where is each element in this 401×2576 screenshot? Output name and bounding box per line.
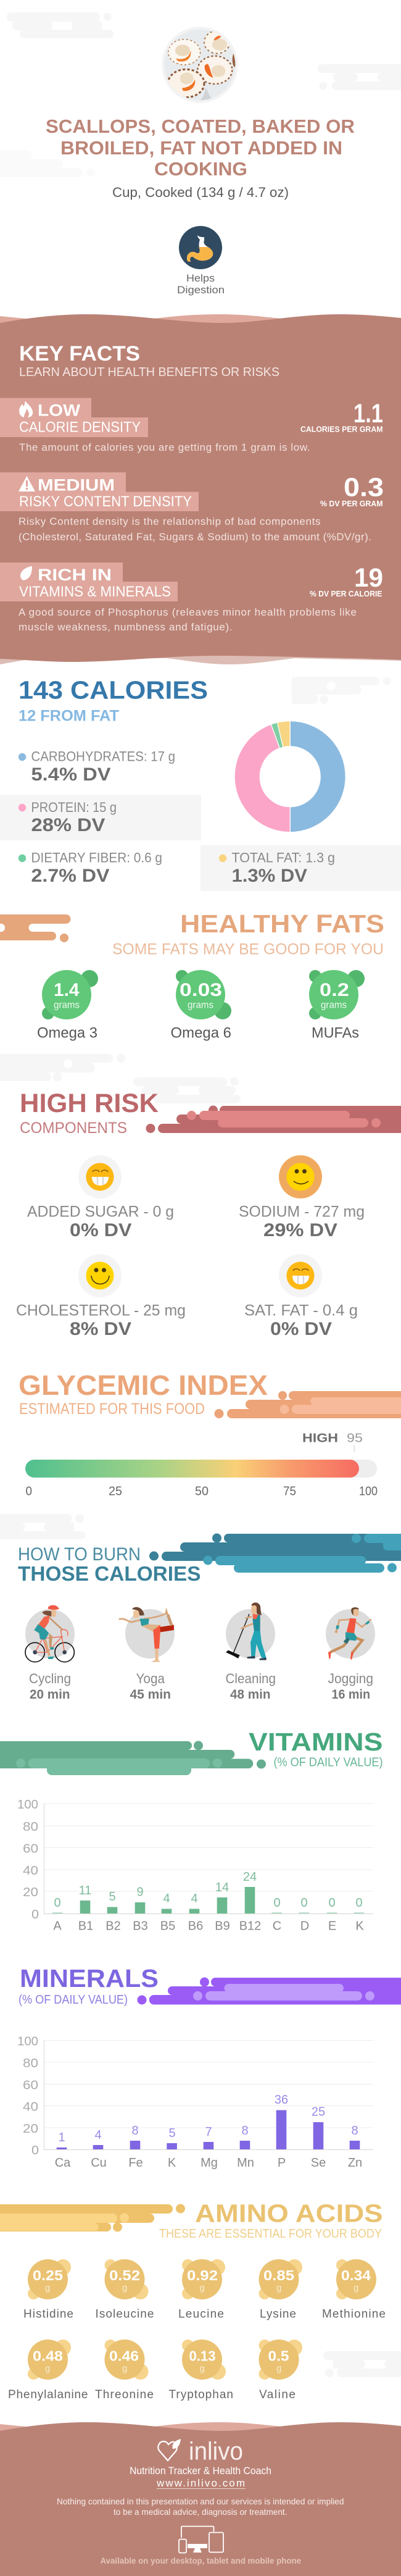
bar chart: vitamins: 9 [136, 1886, 144, 1899]
amino acid: tryptophan: Tryptophan [169, 2388, 233, 2401]
fat: omega 6 [170, 970, 231, 1041]
bar chart: minerals [17, 2035, 373, 2170]
risk: cholesterol [16, 1254, 186, 1339]
nutrient: protein: 28% DV [31, 815, 105, 835]
benefit label: Helps [186, 272, 215, 284]
bar chart: vitamins: B9 [215, 1919, 230, 1933]
amino acid: leucine: 0.92 [187, 2267, 218, 2283]
amino acid: methionine [322, 2259, 386, 2320]
amino acid: lysine: g [276, 2283, 281, 2293]
background cloud: amino acids [323, 2351, 401, 2377]
bar chart: minerals: 8 [241, 2124, 249, 2138]
bar chart: vitamins: K [355, 1919, 364, 1933]
chart: glycemic scale [25, 1431, 378, 1498]
fact: medium risky content density: MEDIUM [38, 475, 115, 494]
fat: omega 6: Omega 6 [170, 1025, 231, 1041]
fat: omega 3: grams [54, 1000, 80, 1010]
title [46, 115, 355, 180]
amino acid: isoleucine [95, 2259, 154, 2320]
amino acid: histidine [23, 2259, 73, 2320]
fact: rich in vitamins and minerals: % DV PER CALORIE [310, 589, 382, 598]
title: COOKING [154, 158, 247, 180]
fat: omega 3 [37, 970, 98, 1041]
benefit label [177, 272, 225, 296]
bar chart: vitamins: 0 [300, 1896, 308, 1910]
activity: jogging [326, 1607, 375, 1702]
bar chart: vitamins [17, 1798, 373, 1933]
bar chart: vitamins: 80 [23, 1820, 38, 1834]
amino acid: valine: 0.5 [268, 2348, 289, 2364]
stat bands [0, 795, 401, 891]
nutrient: dietary fiber: 2.7% DV [31, 866, 110, 886]
amino acid: histidine: 0.25 [33, 2267, 63, 2283]
bar chart: vitamins: 0 [328, 1896, 336, 1910]
bar chart: vitamins: E [328, 1919, 336, 1933]
bar chart: minerals: Mn [237, 2156, 254, 2170]
amino acid: lysine [259, 2259, 302, 2320]
amino acid: threonine [95, 2340, 154, 2401]
bar chart: vitamins: B5 [160, 1919, 175, 1933]
amino acid: valine: Valine [259, 2388, 296, 2401]
fact: low calorie density: 1.1 [353, 399, 383, 429]
heading: how to burn those calories [18, 1544, 201, 1585]
activity: cleaning: 48 min [230, 1687, 270, 1702]
subheading: amino acids: THESE ARE ESSENTIAL FOR YOUR BODY [159, 2227, 382, 2241]
amino acid: tryptophan [169, 2340, 233, 2401]
amino acid: isoleucine: Isoleucine [95, 2308, 154, 2320]
banner graphic: vitamins [0, 1741, 266, 1775]
bar chart: vitamins: 0 [273, 1896, 281, 1910]
amino acid: leucine: Leucine [178, 2308, 224, 2320]
subheading: from fat: 12 FROM FAT [19, 708, 119, 725]
bar chart: vitamins: 4 [191, 1892, 198, 1905]
amino acid: valine: g [276, 2364, 281, 2373]
activity: jogging: 16 min [332, 1687, 370, 1702]
heading: amino acids: AMINO ACIDS [195, 2199, 382, 2228]
chart: glycemic scale: 25 [109, 1484, 122, 1498]
fat: omega 6: grams [188, 1000, 213, 1010]
nutrient: protein [19, 800, 117, 835]
fact: low calorie density: The amount of calories you are getting from 1 gram is low. [19, 441, 310, 453]
amino acid: lysine: Lysine [260, 2308, 296, 2320]
bar chart: vitamins: 100 [17, 1798, 38, 1812]
fact: rich in vitamins and minerals: VITAMINS & MINERALS [19, 583, 171, 600]
bar chart: minerals: 20 [23, 2122, 38, 2136]
bar chart: minerals: Mg [200, 2156, 218, 2170]
bar chart: vitamins: 11 [79, 1884, 91, 1897]
amino acid: tryptophan: 0.13 [189, 2348, 216, 2364]
bar chart: vitamins: B2 [105, 1919, 121, 1933]
fact: rich in vitamins and minerals: A good source of Phosphorus (releaves minor health problems like [19, 606, 357, 618]
fact: low calorie density: CALORIES PER GRAM [300, 425, 382, 433]
fact: low calorie density [0, 398, 383, 453]
banner graphic: minerals [137, 1977, 401, 2004]
background clouds: header [0, 12, 401, 177]
nutrient: total fat: 1.3% DV [232, 866, 307, 886]
bar chart: vitamins: B3 [133, 1919, 148, 1933]
nutrient: carbohydrates: 5.4% DV [31, 764, 111, 785]
bar chart: vitamins: B6 [188, 1919, 203, 1933]
disclaimer: to be a medical advice, diagnosis or treatment. [114, 2507, 287, 2517]
nutrient: carbohydrates [19, 748, 175, 785]
subheading: vitamins: (% OF DAILY VALUE) [274, 1756, 382, 1770]
banner graphic: amino acids [0, 2204, 185, 2231]
activity: yoga: 45 min [130, 1687, 171, 1702]
background clouds: high risk [0, 1054, 241, 1103]
bar chart: minerals: 4 [94, 2128, 102, 2142]
activity: jogging: Jogging [328, 1671, 373, 1686]
website link: www.inlivo.com [156, 2477, 245, 2489]
bar chart: minerals: 7 [205, 2125, 212, 2139]
bar chart: minerals: 100 [17, 2035, 38, 2049]
fat: omega 3: Omega 3 [37, 1025, 97, 1041]
amino acid: valine [259, 2340, 302, 2401]
food photo: scallops [162, 27, 238, 103]
fat: omega 6: 0.03 [180, 980, 222, 1000]
bar chart: vitamins: A [53, 1919, 62, 1933]
activity: cycling [25, 1605, 75, 1702]
risk: saturated fat [244, 1254, 358, 1339]
fat: MUFAs [309, 970, 365, 1041]
amino acid: methionine: g [353, 2283, 358, 2293]
subheading: glycemic index: ESTIMATED FOR THIS FOOD [19, 1400, 205, 1418]
icon: devices [179, 2527, 223, 2553]
fact: rich in vitamins and minerals: muscle weakness, numbness and fatigue). [19, 621, 232, 633]
risk: added sugar [27, 1155, 174, 1240]
heading: calories: 143 CALORIES [19, 675, 208, 704]
chart: macronutrient donut [234, 721, 345, 832]
bar chart: vitamins: 60 [23, 1842, 38, 1856]
bar chart: vitamins: B1 [78, 1919, 93, 1933]
chart: glycemic scale: 75 [283, 1484, 296, 1498]
bar chart: minerals: K [168, 2156, 176, 2170]
activity: cleaning [226, 1602, 276, 1702]
nutrient: dietary fiber: DIETARY FIBER: 0.6 g [31, 850, 162, 866]
fact: low calorie density: LOW [38, 401, 81, 420]
bar chart: vitamins: C [273, 1919, 281, 1933]
bar chart: minerals: 8 [351, 2124, 358, 2138]
nutrient: total fat [219, 850, 335, 886]
subheading: LEARN ABOUT HEALTH BENEFITS OR RISKS [19, 366, 279, 379]
fat: MUFAs: grams [321, 1000, 347, 1010]
fact: medium risky content density: (Cholesterol, Saturated Fat, Sugars & Sodium) to the amount (%DV/gr). [19, 531, 371, 543]
fact: medium risky content density: % DV PER GRAM [320, 499, 382, 508]
heading: key facts: KEY FACTS [19, 342, 140, 366]
bar chart: minerals: Se [311, 2156, 326, 2170]
icon: stomach, helps digestion [179, 226, 222, 269]
risk: added sugar: ADDED SUGAR - 0 g [27, 1203, 174, 1220]
nutrient: protein: PROTEIN: 15 g [31, 800, 117, 815]
disclaimer: Nothing contained in this presentation and our services is intended or implied [57, 2496, 344, 2506]
bar chart: vitamins: 40 [23, 1864, 38, 1878]
bar chart: minerals: Fe [128, 2156, 143, 2170]
background cloud: burn calories [0, 1514, 85, 1539]
subheading: healthy fats: SOME FATS MAY BE GOOD FOR YOU [112, 941, 384, 958]
bar chart: minerals: 5 [168, 2126, 176, 2140]
fat: MUFAs: MUFAs [312, 1025, 359, 1041]
fact: low calorie density: CALORIE DENSITY [19, 419, 141, 436]
bar chart: minerals: 60 [23, 2078, 38, 2092]
bar chart: vitamins: D [300, 1919, 309, 1933]
activity: yoga: Yoga [136, 1671, 165, 1686]
heading: healthy fats: HEALTHY FATS [180, 910, 384, 938]
risk: cholesterol: 8% DV [70, 1319, 131, 1339]
chart: glycemic scale: 0 [26, 1484, 32, 1498]
risk: saturated fat: SAT. FAT - 0.4 g [244, 1302, 358, 1319]
fact: medium risky content density: Risky Content density is the relationship of bad components [19, 516, 321, 527]
footer panel [0, 2422, 401, 2576]
availability note: Available on your desktop, tablet and mobile phone [100, 2556, 301, 2566]
bar chart: vitamins: 0 [31, 1908, 39, 1922]
title: SCALLOPS, COATED, BAKED OR [46, 115, 355, 137]
nutrient: carbohydrates: CARBOHYDRATES: 17 g [31, 748, 175, 764]
amino acid: histidine: g [45, 2283, 50, 2293]
amino acid: phenylalanine: Phenylalanine [8, 2388, 88, 2401]
fact: medium risky content density: 0.3 [344, 473, 384, 503]
nutrient: total fat: TOTAL FAT: 1.3 g [232, 850, 335, 866]
amino acid: isoleucine: 0.52 [109, 2267, 140, 2283]
risk: saturated fat: 0% DV [270, 1319, 332, 1339]
risk: added sugar: 0% DV [70, 1220, 132, 1240]
fact: medium risky content density [0, 472, 384, 543]
amino acid: leucine: g [200, 2283, 205, 2293]
heading: vitamins: VITAMINS [249, 1728, 382, 1756]
bar chart: minerals: 1 [58, 2131, 65, 2144]
bar chart: vitamins: 20 [23, 1886, 38, 1899]
bar chart: vitamins: B12 [239, 1919, 261, 1933]
amino acid: isoleucine: g [122, 2283, 127, 2293]
amino acid: histidine: Histidine [23, 2308, 73, 2320]
fact: rich in vitamins and minerals: RICH IN [38, 566, 112, 584]
amino acid: methionine: Methionine [322, 2308, 386, 2320]
bar chart: vitamins: 5 [109, 1890, 116, 1904]
amino acid: threonine: Threonine [95, 2388, 154, 2401]
logo: wordmark: inlivo [189, 2436, 243, 2465]
activity: yoga [119, 1607, 175, 1702]
bar chart: vitamins: 0 [355, 1896, 363, 1910]
fat: omega 3: 1.4 [54, 980, 80, 1000]
disclaimer [57, 2496, 344, 2517]
risk: sodium [239, 1155, 365, 1240]
bar chart: minerals: 40 [23, 2101, 38, 2114]
heading: minerals: MINERALS [20, 1964, 159, 1993]
activity: cycling: 20 min [30, 1687, 70, 1702]
logo: heart and leaf [158, 2439, 181, 2461]
bar chart: vitamins: 0 [54, 1896, 61, 1910]
subheading: components: COMPONENTS [20, 1119, 127, 1137]
amino acid: phenylalanine: g [45, 2364, 50, 2373]
banner graphic: healthy fats [0, 914, 71, 942]
bar chart: minerals: 80 [23, 2057, 38, 2070]
serving size: Cup, Cooked (134 g / 4.7 oz) [112, 185, 289, 200]
bar chart: vitamins: 14 [215, 1881, 229, 1894]
amino acid: lysine: 0.85 [263, 2267, 294, 2283]
amino acid: methionine: 0.34 [341, 2267, 371, 2283]
benefit label: Digestion [177, 284, 225, 296]
tagline: Nutrition Tracker & Health Coach [130, 2465, 271, 2477]
heading: high risk: HIGH RISK [20, 1089, 159, 1118]
bar chart: minerals: 8 [131, 2124, 139, 2138]
chart: glycemic scale: HIGH [302, 1431, 338, 1445]
panel: key facts [0, 314, 401, 664]
fat: MUFAs: 0.2 [320, 980, 349, 1000]
chart: glycemic scale: 100 [359, 1484, 378, 1498]
fact: rich in vitamins and minerals: 19 [354, 563, 383, 593]
amino acid: phenylalanine [8, 2340, 88, 2401]
fact: rich in vitamins and minerals [0, 562, 383, 633]
heading: how to burn those calories: HOW TO BURN [18, 1544, 141, 1565]
banner graphic: high risk [146, 1105, 401, 1133]
heading: glycemic index: GLYCEMIC INDEX [19, 1370, 268, 1401]
amino acid: threonine: 0.46 [109, 2348, 139, 2364]
bar chart: minerals: 0 [31, 2144, 39, 2157]
heading: how to burn those calories: THOSE CALORIES [18, 1562, 201, 1585]
bar chart: vitamins: 24 [243, 1870, 257, 1884]
chart: glycemic scale: 50 [195, 1484, 209, 1498]
banner graphic: burn calories [149, 1534, 401, 1573]
amino acid: leucine [178, 2259, 225, 2320]
activity: cycling: Cycling [29, 1671, 71, 1686]
bar chart: minerals: P [278, 2156, 286, 2170]
bar chart: minerals: 25 [312, 2106, 325, 2119]
bar chart: minerals: Cu [91, 2156, 107, 2170]
title: BROILED, FAT NOT ADDED IN [60, 137, 342, 159]
activity: cleaning: Cleaning [226, 1671, 276, 1686]
banner graphic: glycemic index [215, 1391, 401, 1418]
chart: glycemic scale: 95 [347, 1431, 363, 1445]
bar chart: minerals: 36 [275, 2093, 288, 2107]
fact: medium risky content density: RISKY CONTENT DENSITY [19, 493, 192, 510]
amino acid: threonine: g [122, 2364, 127, 2373]
amino acid: tryptophan: g [200, 2364, 205, 2373]
bar chart: vitamins: 4 [163, 1892, 170, 1905]
background cloud: calories [292, 677, 379, 704]
bar chart: minerals: Ca [55, 2156, 71, 2170]
nutrient: dietary fiber [19, 850, 162, 886]
risk: sodium: 29% DV [263, 1220, 337, 1240]
risk: sodium: SODIUM - 727 mg [239, 1203, 365, 1220]
bar chart: minerals: Zn [348, 2156, 362, 2170]
subheading: minerals: (% OF DAILY VALUE) [19, 1993, 128, 2007]
amino acid: phenylalanine: 0.48 [33, 2348, 63, 2364]
risk: cholesterol: CHOLESTEROL - 25 mg [16, 1302, 186, 1319]
